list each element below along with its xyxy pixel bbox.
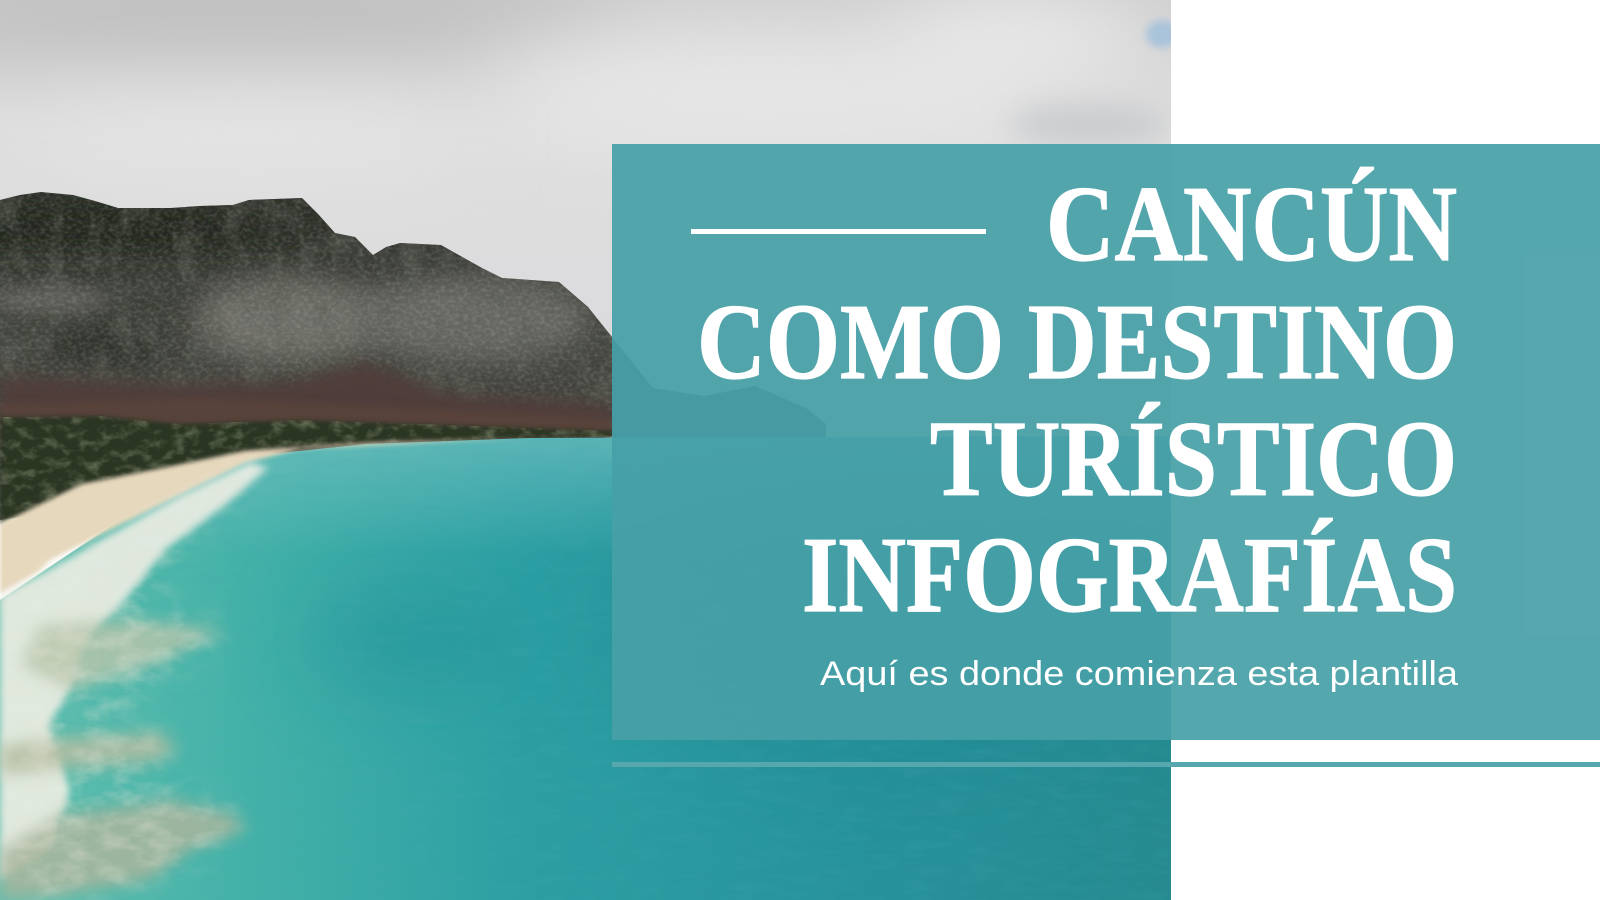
sea xyxy=(0,430,1200,900)
tree line xyxy=(0,410,612,530)
title xyxy=(697,165,1457,635)
title: TURÍSTICO xyxy=(930,400,1457,519)
background photo: coast xyxy=(0,0,1200,900)
rule beside first title line xyxy=(691,229,986,234)
distant hazy headlands xyxy=(612,337,826,438)
title: CANCÚN xyxy=(1046,165,1457,284)
rule below panel xyxy=(612,762,1600,767)
brown lower slope xyxy=(0,362,612,445)
surf and sediment xyxy=(0,460,272,900)
title: COMO DESTINO xyxy=(697,283,1457,402)
sky with clouds xyxy=(0,0,1178,440)
subtitle: Aquí es donde comienza esta plantilla xyxy=(820,655,1458,693)
title: INFOGRAFÍAS xyxy=(802,516,1457,635)
mountain range xyxy=(0,180,612,520)
beach sand xyxy=(0,438,530,594)
panel: translucent teal title block xyxy=(612,144,1600,740)
